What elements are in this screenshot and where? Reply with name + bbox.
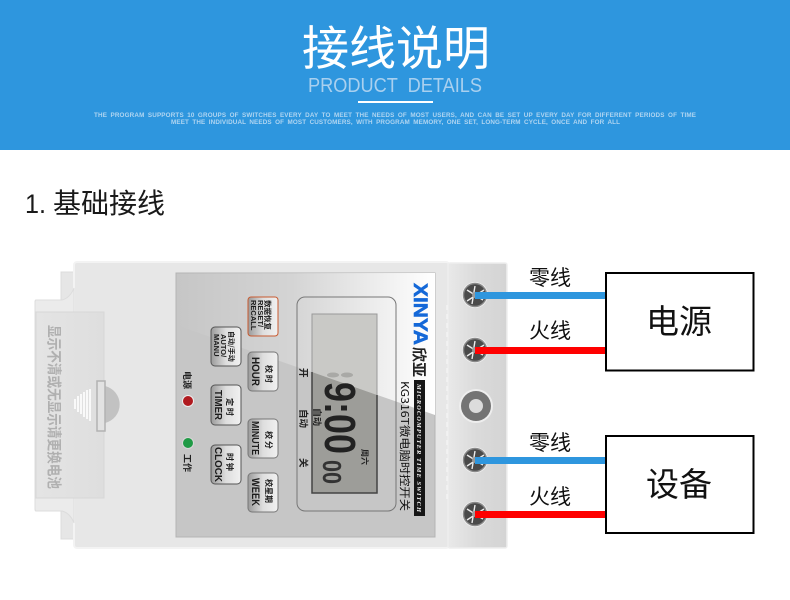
button: auto/manu bbox=[211, 327, 241, 366]
header banner bbox=[0, 0, 790, 150]
black tagline strip bbox=[414, 380, 425, 516]
button: minute: 校 分 bbox=[263, 431, 274, 449]
label: neutral 1: 零线 bbox=[529, 262, 571, 292]
LED: work: 工作 bbox=[181, 454, 194, 472]
brand logo: 欣亚 bbox=[409, 347, 430, 377]
terminal screw 3 bbox=[462, 447, 488, 473]
button: clock bbox=[211, 445, 241, 484]
button: minute: MINUTE bbox=[249, 421, 260, 455]
button: reset/recall: RECALL bbox=[249, 300, 258, 331]
mode labels bbox=[297, 368, 311, 468]
LCD auto label: 自动 bbox=[311, 408, 324, 426]
button: auto/manu: MANU bbox=[212, 334, 221, 356]
header underline bbox=[358, 101, 433, 103]
button: auto/manu: 自动/手动 bbox=[226, 331, 236, 362]
button: auto/manu: AUTO/ bbox=[219, 334, 228, 358]
button: reset/recall: RESET/ bbox=[256, 300, 265, 328]
wire: live to power bbox=[475, 347, 606, 354]
label: live 1: 火线 bbox=[529, 315, 571, 345]
black tagline strip: MICROCOMPUTER TIME SWITCH bbox=[415, 383, 422, 513]
brand logo bbox=[409, 283, 430, 377]
button: week bbox=[248, 473, 278, 512]
device: timer switch bbox=[35, 262, 507, 548]
cover text: 显示不清或无显示请更换电池 bbox=[44, 325, 65, 489]
mounting tabs bbox=[61, 272, 80, 539]
LCD seconds: 00 bbox=[317, 460, 347, 484]
button: timer: TIMER bbox=[212, 390, 224, 420]
button: clock: 时 钟 bbox=[224, 453, 235, 471]
button: minute bbox=[248, 419, 278, 458]
LED: work bbox=[181, 438, 194, 472]
terminal strip bbox=[447, 263, 507, 548]
terminal mounting hole bbox=[459, 389, 493, 423]
terminal screw 4 bbox=[462, 501, 488, 527]
mode labels: 关 bbox=[297, 458, 311, 468]
subtitle: PRODUCT DETAILS bbox=[308, 75, 482, 97]
wire: live to device bbox=[475, 511, 606, 518]
box: equipment bbox=[606, 436, 754, 533]
button: hour: HOUR bbox=[249, 357, 261, 386]
LCD display bbox=[297, 297, 396, 511]
label: live 2: 火线 bbox=[529, 481, 571, 511]
button: timer bbox=[211, 385, 241, 425]
label: neutral 2: 零线 bbox=[529, 427, 571, 457]
LCD time: 9:00 bbox=[315, 382, 364, 454]
terminal screw 1 bbox=[462, 282, 488, 308]
section heading: 1. bbox=[25, 189, 46, 219]
button: reset/recall: 数据恢复 bbox=[262, 300, 273, 330]
button: clock: CLOCK bbox=[212, 447, 224, 482]
LED: power bbox=[181, 371, 194, 406]
LED: power: 电源 bbox=[181, 371, 194, 389]
mode labels: 自动 bbox=[297, 409, 311, 429]
section heading: 基础接线 bbox=[53, 182, 165, 222]
button: hour: 校 时 bbox=[263, 365, 274, 383]
wire: neutral to device bbox=[475, 457, 606, 464]
title: 接线说明 bbox=[302, 10, 490, 79]
box: power source: 电源 bbox=[646, 295, 712, 343]
battery cover bbox=[35, 288, 120, 523]
box: equipment: 设备 bbox=[646, 458, 712, 506]
button: reset/recall bbox=[248, 297, 278, 336]
header description bbox=[94, 112, 696, 126]
device body bbox=[74, 262, 449, 548]
cover latch bbox=[75, 381, 120, 431]
button: timer: 定 时 bbox=[224, 398, 235, 416]
box: power source bbox=[606, 273, 754, 370]
LCD weekday: 周六 bbox=[359, 449, 370, 465]
button: hour bbox=[248, 352, 278, 391]
button: week: 校星期 bbox=[263, 479, 274, 503]
mode labels: 开 bbox=[297, 368, 311, 378]
control faceplate bbox=[176, 273, 435, 537]
model name: KG316T微电脑时控开关 bbox=[397, 381, 413, 511]
terminal screw 2 bbox=[462, 337, 488, 363]
brand logo: XINYA bbox=[409, 283, 430, 345]
header description: THE PROGRAM SUPPORTS 10 GROUPS OF SWITCHES EVERY DAY TO MEET THE NEEDS OF MOST USERS, AND CAN BE SET UP EVERY DAY FOR DIFFERENT PERIODS OF TIME bbox=[94, 112, 696, 119]
wire: neutral to power bbox=[475, 292, 606, 299]
button: week: WEEK bbox=[249, 478, 261, 506]
header description: MEET THE INDIVIDUAL NEEDS OF MOST CUSTOMERS, WITH PROGRAM MEMORY, ONE SET, LONG-TERM CYCLE, ONCE AND FOR ALL bbox=[171, 119, 620, 126]
